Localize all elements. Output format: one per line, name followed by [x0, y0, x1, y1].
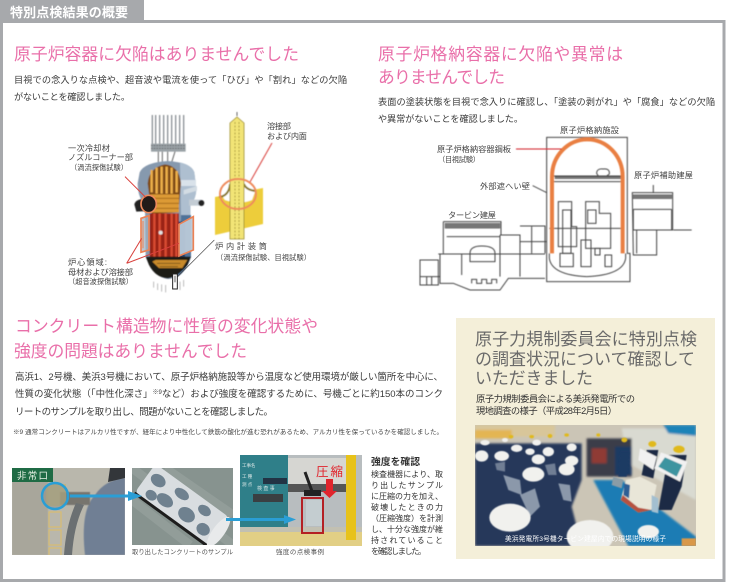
text block: strength check: し、十分な強度が維 — [371, 524, 443, 534]
photo: compression test: 検 査 事 — [257, 485, 275, 492]
text block: site survey: 現地調査の様子（平成28年2月5日） — [476, 405, 617, 416]
heading: regulator inspection: の調査状況について確認して — [475, 350, 695, 369]
label: nozzle corner — [68, 143, 133, 172]
text block: concrete structures: 高浜1、2号機、美浜3号機において、原子炉格納施設等から温度など使用環境が厳しい箇所を中心に、 — [15, 371, 443, 383]
panel: reactor vessel — [14, 45, 347, 292]
text block: strength check: 持されていること — [371, 535, 443, 545]
heading: concrete structures: 強度の問題はありませんでした — [14, 342, 247, 361]
diagram: containment building section — [420, 137, 692, 290]
heading: containment vessel: 原子炉格納容器に欠陥や異常は — [378, 45, 623, 64]
label: in-core instrument tube: （渦流探傷試験、目視試験） — [216, 253, 311, 262]
text block: strength check — [371, 455, 443, 556]
label: auxiliary building: 原子炉補助建屋 — [634, 170, 693, 180]
text block: strength check: 強度を確認 — [371, 455, 420, 468]
text block: concrete structures: 性質の変化状態（「中性化深さ」 — [15, 389, 153, 400]
label: in-core instrument tube — [215, 241, 311, 262]
label: containment facility: 原子炉格納施設 — [560, 125, 619, 135]
heading: concrete structures: コンクリート構造物に性質の変化状態や — [15, 317, 318, 336]
label: core region: 母材および溶接部 — [68, 267, 133, 277]
photo: compression test: 測 点 — [242, 481, 253, 488]
footnote: ※9 通常コンクリートはアルカリ性ですが、経年により中性化して鉄筋の酸化が進む恐れがあるため、アルカリ性を保っているかを確認しました。 — [13, 427, 443, 436]
text block: strength check: （圧縮強度）を計測 — [371, 513, 443, 523]
label: containment steel plate: 原子炉格納容器鋼板 — [437, 144, 511, 154]
label: nozzle corner: ノズルコーナー部 — [68, 152, 133, 162]
text block: reactor vessel: 目視での念入りな点検や、超音波や電流を使って「ひび」や「割れ」などの欠陥 — [14, 74, 347, 85]
panel: concrete structures — [12, 317, 443, 560]
diagram: reactor vessel cutaway — [125, 115, 214, 292]
text block: reactor vessel — [14, 74, 347, 102]
text block: containment vessel: 表面の塗装状態を目視で念入りに確認し、「塗装の剥がれ」や「腐食」などの欠陥 — [378, 96, 715, 107]
label: containment steel plate: （目視試験） — [438, 155, 480, 164]
header tab: 特別点検結果の概要 — [10, 5, 128, 20]
label: core region — [68, 257, 133, 286]
text block: strength check: 検査機器により、取 — [371, 469, 443, 479]
panel: regulator inspection — [456, 318, 715, 559]
text block: concrete structures: ※9 — [153, 389, 163, 396]
diagram: weld detail — [215, 112, 272, 239]
heading: concrete structures — [14, 317, 318, 361]
label: nozzle corner: （渦流探傷試験） — [70, 163, 128, 172]
label: core region: （超音波探傷試験） — [68, 277, 133, 286]
label: in-core instrument tube: 炉内計装筒 — [215, 241, 267, 251]
sign: emergency exit: 非常口 — [17, 470, 48, 482]
heading: regulator inspection: 原子力規制委員会に特別点検 — [475, 330, 697, 349]
text block: strength check: 破壊したときの力 — [371, 502, 443, 512]
heading: containment vessel — [378, 45, 623, 87]
header tab — [0, 0, 144, 21]
panel: containment vessel — [378, 45, 715, 290]
photo: core sampling — [12, 468, 125, 560]
caption: photo: 美浜発電所3号機タービン建屋内での現場説明の様子 — [505, 534, 666, 543]
heading: regulator inspection: いただきました — [475, 369, 593, 388]
text block: strength check: に圧縮の力を加え、 — [371, 491, 443, 501]
label: compression: 圧縮 — [316, 464, 343, 479]
label: containment steel plate — [437, 144, 511, 164]
heading: regulator inspection — [475, 330, 697, 388]
photo: compression test: 工 種 — [242, 473, 253, 480]
caption: test: 強度の点検事例 — [276, 547, 324, 556]
label: weld and inner surface — [267, 121, 307, 141]
text block: strength check: を確認しました。 — [371, 546, 426, 556]
label: turbine building: タービン建屋 — [448, 210, 496, 220]
text block: strength check: り出したサンプル — [371, 480, 443, 490]
label: weld and inner surface: および内面 — [267, 131, 307, 141]
text block: containment vessel: や異常がないことを確認しました。 — [378, 113, 523, 124]
label: core region: 炉心領域: — [68, 257, 107, 267]
text block: site survey — [476, 393, 635, 416]
photo: site survey — [475, 425, 696, 553]
text block: reactor vessel: がないことを確認しました。 — [14, 91, 130, 102]
text block: containment vessel — [378, 96, 715, 124]
text block: concrete structures: など）および強度を確認するために、号機ごとに約150本のコンク — [162, 388, 443, 400]
text block: concrete structures — [15, 371, 443, 418]
heading: containment vessel: ありませんでした — [378, 68, 505, 87]
label: outer shield wall: 外部遮へい壁 — [480, 181, 530, 191]
label: weld and inner surface: 溶接部 — [267, 121, 291, 131]
arrow: sampling to sample — [70, 491, 142, 501]
photo: concrete sample — [132, 468, 233, 545]
label: nozzle corner: 一次冷却材 — [68, 143, 110, 153]
caption: sample: 取り出したコンクリートのサンプル — [132, 547, 233, 556]
text block: concrete structures: リートのサンプルを取り出し、問題がないことを確認しました。 — [15, 406, 273, 418]
heading: reactor vessel: 原子炉容器に欠陥はありませんでした — [14, 45, 299, 64]
photo: compression test: 工事名 — [242, 462, 256, 469]
icon: down arrow — [322, 479, 337, 498]
photo: compression test — [240, 455, 362, 546]
arrow: sample to test — [226, 515, 296, 524]
text block: site survey: 原子力規制委員会による美浜発電所での — [476, 393, 635, 404]
